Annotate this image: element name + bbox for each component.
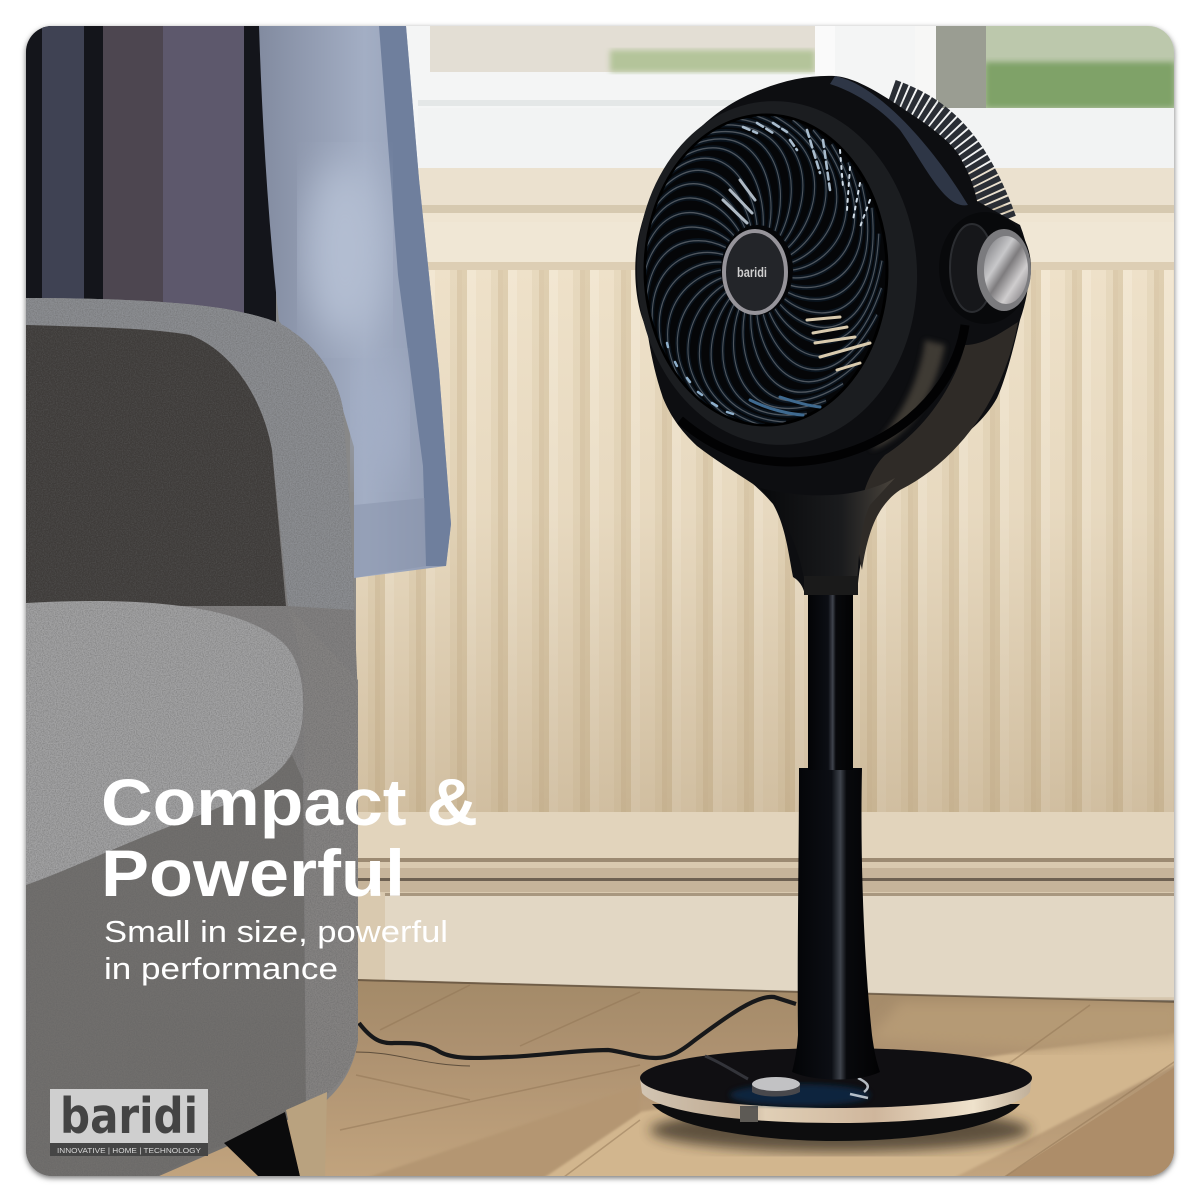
chair leg <box>224 1112 300 1176</box>
chair top highlight <box>26 298 354 610</box>
side metal knob <box>977 229 1031 311</box>
heading: Powerful <box>101 836 405 910</box>
logo: baridi: INNOVATIVE | HOME | TECHNOLOGY <box>57 1146 201 1155</box>
fan body shell <box>635 76 1029 595</box>
wooden leg block <box>286 1092 327 1176</box>
skirting board <box>356 812 1180 1000</box>
front ring <box>628 94 926 452</box>
radiator and wall <box>356 168 1180 818</box>
subheading: Small in size, powerful <box>104 914 448 949</box>
lower pole <box>792 768 880 1080</box>
heading <box>104 779 476 896</box>
groove arc <box>680 325 965 462</box>
centre hub <box>724 231 786 313</box>
armchair <box>26 296 361 1181</box>
side control socket <box>949 223 1031 313</box>
fan blades <box>646 116 884 424</box>
black inner grille <box>645 115 887 425</box>
seat cushion <box>26 601 303 885</box>
fabric grain <box>26 296 361 1181</box>
base <box>640 1048 1032 1141</box>
heading: Compact & <box>101 765 478 839</box>
subheading <box>104 914 448 986</box>
wooden floor <box>100 979 1180 1180</box>
centre hub: baridi <box>737 264 767 280</box>
blade glints <box>667 123 870 415</box>
window with panes and frame <box>400 26 1180 176</box>
electric cable <box>356 997 796 1066</box>
dark back curtain <box>26 26 276 326</box>
upper pole <box>808 592 853 770</box>
logo: baridi: baridi <box>60 1088 198 1145</box>
chair body <box>26 298 358 1180</box>
rear grille <box>890 96 1000 222</box>
dark inner back panel <box>26 325 286 606</box>
light blue-grey curtain <box>259 26 451 578</box>
base control knob <box>752 1077 800 1096</box>
glossy lower shell <box>858 322 1018 570</box>
subheading: in performance <box>104 951 338 986</box>
fan <box>614 76 1032 1152</box>
floor shadow <box>650 1108 1030 1152</box>
